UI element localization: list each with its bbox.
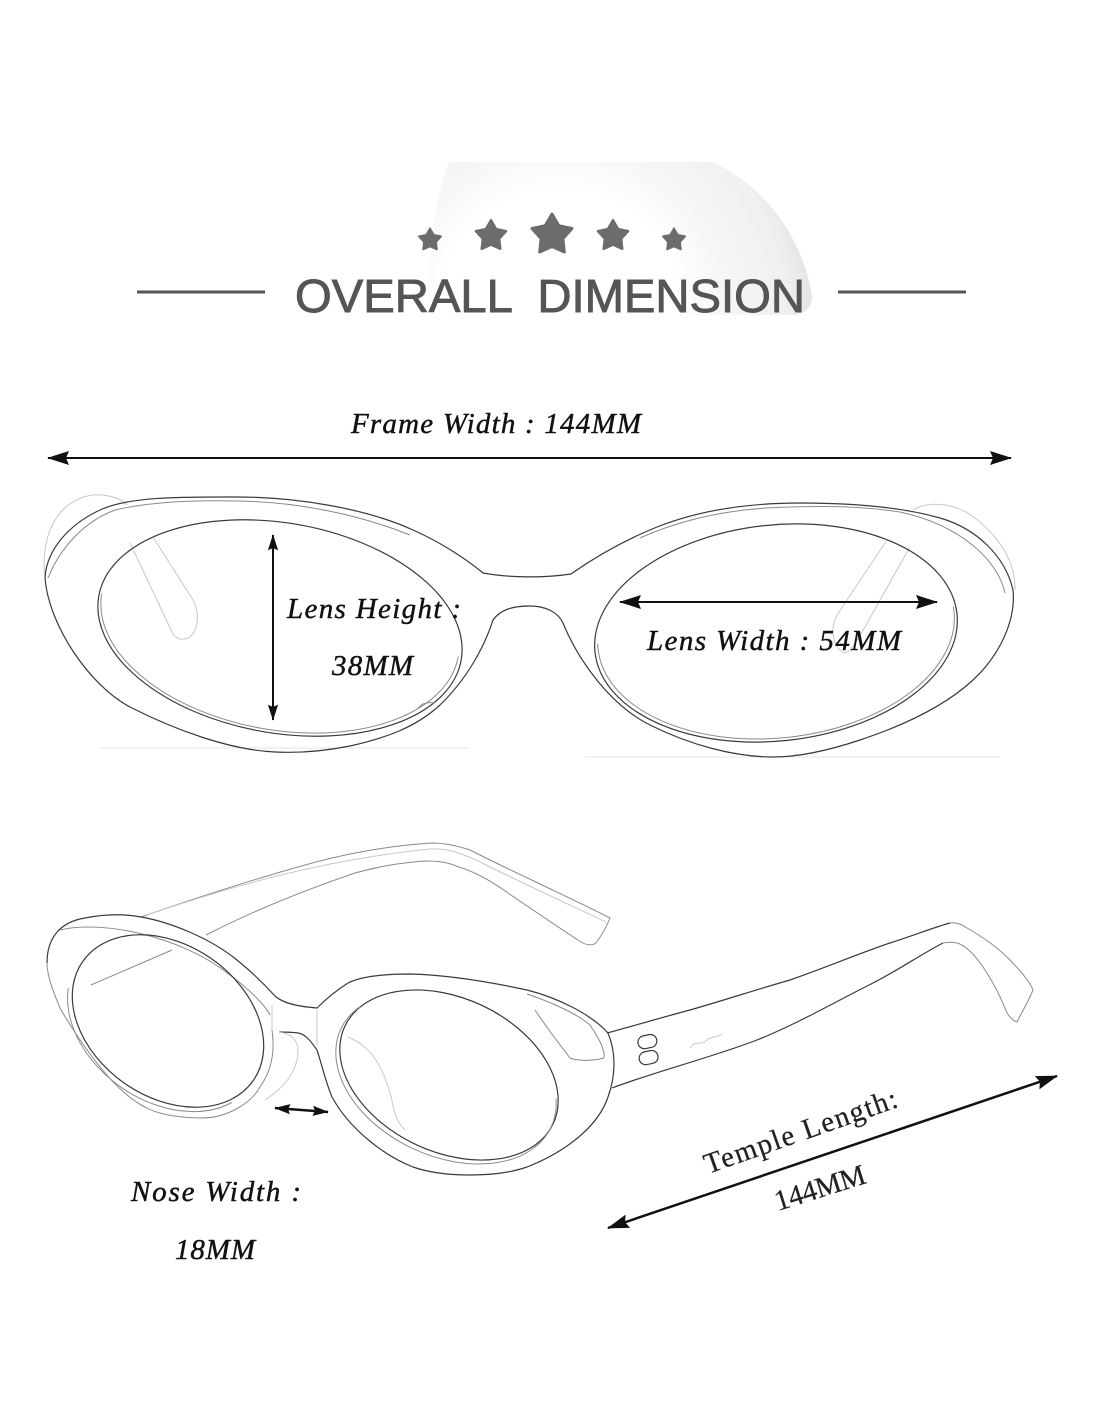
nose width measurement: 18MM bbox=[175, 1234, 257, 1266]
frame width measurement: Frame Width : 144MM bbox=[350, 408, 643, 440]
nose width measurement: Nose Width : bbox=[130, 1176, 301, 1208]
lens width measurement: Lens Width : 54MM bbox=[646, 625, 903, 657]
nose width measurement bbox=[130, 1108, 328, 1266]
rating stars bbox=[419, 214, 685, 252]
header backdrop shape bbox=[429, 162, 812, 315]
temple length measurement bbox=[608, 1076, 1057, 1228]
lens height measurement bbox=[273, 535, 461, 720]
lens height measurement: Lens Height : bbox=[286, 593, 461, 625]
temple length measurement: Temple Length: bbox=[700, 1083, 902, 1181]
lens height measurement: 38MM bbox=[331, 650, 415, 682]
side view glasses bbox=[34, 843, 1033, 1198]
temple length measurement: 144MM bbox=[770, 1159, 870, 1218]
front view glasses bbox=[44, 490, 1015, 763]
title: OVERALL DIMENSION bbox=[295, 270, 805, 322]
